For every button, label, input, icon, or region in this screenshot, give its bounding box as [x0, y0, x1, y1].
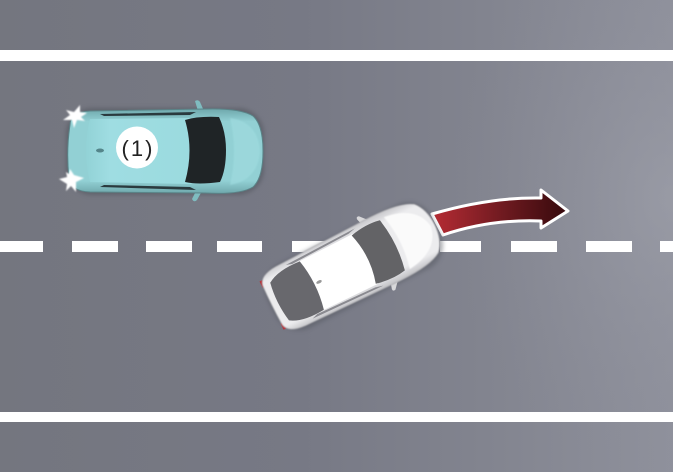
- teal car body: [68, 109, 263, 193]
- white car changing lanes: [252, 187, 454, 343]
- white car side windows: [285, 228, 383, 320]
- label badge (1): [116, 126, 158, 168]
- label badge (1): (1): [122, 136, 154, 161]
- white car antenna: [316, 279, 322, 285]
- left hazard light: [63, 105, 87, 128]
- white car body: [256, 193, 450, 337]
- right hazard light: [59, 169, 84, 192]
- white car roof: [287, 231, 383, 317]
- teal car side windows: [100, 112, 196, 190]
- teal car with hazard lights: [59, 100, 264, 201]
- white car hood: [384, 200, 444, 269]
- lane markings: [0, 50, 673, 422]
- white car windscreen: [351, 218, 408, 286]
- teal car shadow: [66, 108, 264, 195]
- white car mirrors: [356, 213, 402, 291]
- white car rear window: [266, 260, 327, 327]
- white car shadow: [255, 194, 452, 339]
- teal car mirrors: [192, 100, 204, 201]
- teal car hood highlight: [230, 118, 260, 185]
- teal car roof: [86, 118, 206, 184]
- teal car antenna: [96, 148, 104, 152]
- arrow: lane departure direction: [432, 190, 568, 235]
- red tail lights: [260, 280, 286, 330]
- teal car windscreen: [185, 117, 226, 184]
